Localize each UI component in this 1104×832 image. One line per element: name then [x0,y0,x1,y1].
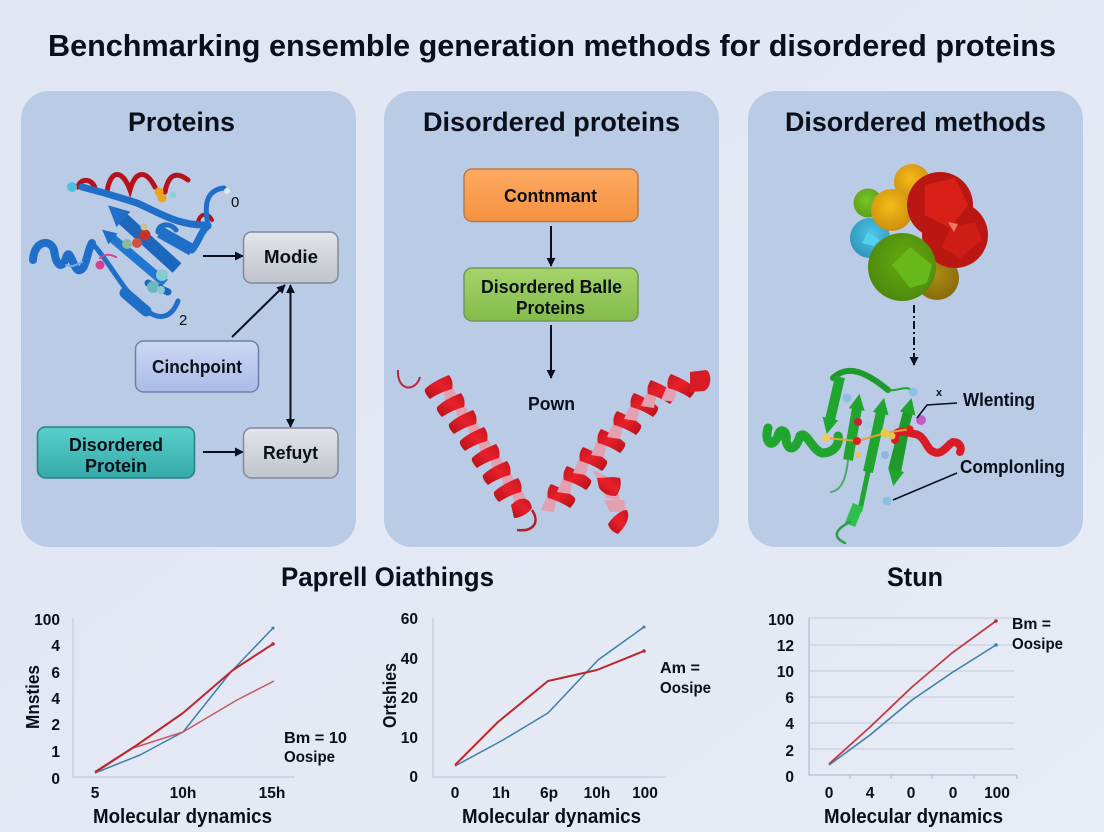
box: refuyt [244,428,338,478]
faceted sphere cluster [850,164,988,301]
callout: complonling [893,457,1065,500]
heading: stun: Stun [887,562,943,592]
number labels: 2 [179,312,187,329]
arrow: disordered to pown [550,325,552,378]
x axis labels: 0 [949,785,957,802]
x axis labels: 15h [259,785,285,802]
atoms [822,388,926,506]
callout: wlenting: Wlenting [963,390,1035,410]
x axis labels: 1h [492,785,510,802]
dash-dot arrow [913,305,915,365]
y axis labels: 20 [401,690,418,707]
legend note [1012,616,1063,653]
panel: disordered proteins [384,91,719,547]
y axis labels: 0 [785,769,794,786]
box: refuyt: Refuyt [263,443,318,463]
x axis title: Molecular dynamics [93,806,272,828]
x axis title: Molecular dynamics [824,806,1003,828]
y axis labels: 1 [51,744,60,761]
legend note [660,660,711,697]
y axis title: Mnsties [23,665,43,729]
y axis labels: 0 [409,769,418,786]
x axis labels: 6p [540,785,558,802]
y axis labels [768,612,794,786]
y axis labels: 4 [785,716,794,733]
line chart 1 [23,612,347,828]
y axis labels: 40 [401,651,418,668]
y axis labels: 0 [51,771,60,788]
x axis labels [451,785,658,802]
line chart 2 [380,611,711,828]
atoms [67,182,230,294]
y axis labels: 6 [785,690,794,707]
green protein ribbon [767,371,961,543]
series lines [95,626,275,773]
y axis labels [34,612,60,788]
heading: disordered proteins: Disordered proteins [423,107,680,137]
box: disordered balle proteins: Disordered Balle [481,277,622,297]
box: contnmant [464,169,638,222]
x axis labels: 4 [866,785,875,802]
x axis labels: 0 [907,785,915,802]
x axis labels: 5 [91,785,100,802]
x axis title: Molecular dynamics [462,806,641,828]
y axis labels: 4 [51,691,60,708]
number labels [179,194,239,329]
box: modie [244,232,338,283]
box: disordered protein: Protein [85,456,147,476]
x axis labels: 100 [984,785,1010,802]
title: Benchmarking ensemble generation methods for disordered proteins [48,28,1056,63]
legend note: Am = [660,660,700,677]
box: modie: Modie [264,247,318,267]
y axis title: Ortshies [380,663,400,728]
helix: left [398,370,536,530]
legend note: Bm = [1012,616,1051,633]
box: disordered balle proteins [464,268,638,321]
x axis labels: 0 [451,785,459,802]
box: contnmant: Contnmant [504,186,597,206]
x axis labels: 10h [584,785,610,802]
arrow: cinchpoint to modie [232,285,285,337]
y axis labels: 100 [768,612,794,629]
y axis labels [401,611,418,786]
x axis labels: 10h [170,785,196,802]
box: disordered balle proteins: Proteins [516,298,585,318]
box: disordered protein: Disordered [69,435,163,455]
x axis labels: 100 [632,785,658,802]
heading: proteins: Proteins [128,107,235,137]
helix: right [541,370,710,534]
number labels: 0 [231,194,239,211]
arrow: contaminant to disordered [550,226,552,266]
legend note: Oosipe [284,749,335,766]
box: disordered protein [38,427,194,478]
y axis labels: 60 [401,611,418,628]
x axis labels: 0 [825,785,833,802]
arrow: modie to refuyt [290,285,292,427]
arrow: disordered protein to refuyt [203,451,243,453]
arrow: protein to modie [203,255,243,257]
heading: disordered methods: Disordered methods [785,107,1046,137]
series lines [829,619,998,765]
series lines [455,626,646,766]
callout: wlenting: x [936,387,943,399]
y axis labels: 10 [401,730,418,747]
label: pown: Pown [528,394,575,414]
y axis labels: 10 [777,664,794,681]
heading: paprell oiathings: Paprell Oiathings [281,562,494,592]
callout: complonling: Complonling [960,457,1065,477]
y axis labels: 2 [785,743,794,760]
y axis labels: 100 [34,612,60,629]
callout: wlenting [917,387,1035,418]
y axis labels: 2 [51,717,60,734]
y axis labels: 6 [51,665,60,682]
box: cinchpoint [136,341,258,392]
legend note: Oosipe [1012,636,1063,653]
box: cinchpoint: Cinchpoint [152,357,242,377]
line chart 3 [768,612,1063,828]
y axis labels: 12 [777,638,794,655]
y axis labels: 4 [51,638,60,655]
panel: disordered methods [748,91,1083,547]
protein ribbon illustration [33,174,224,316]
x axis labels [825,785,1010,802]
panel: proteins [21,91,356,547]
legend note: Oosipe [660,680,711,697]
legend note [284,730,347,766]
x axis labels [91,785,285,802]
legend note: Bm = 10 [284,730,347,747]
